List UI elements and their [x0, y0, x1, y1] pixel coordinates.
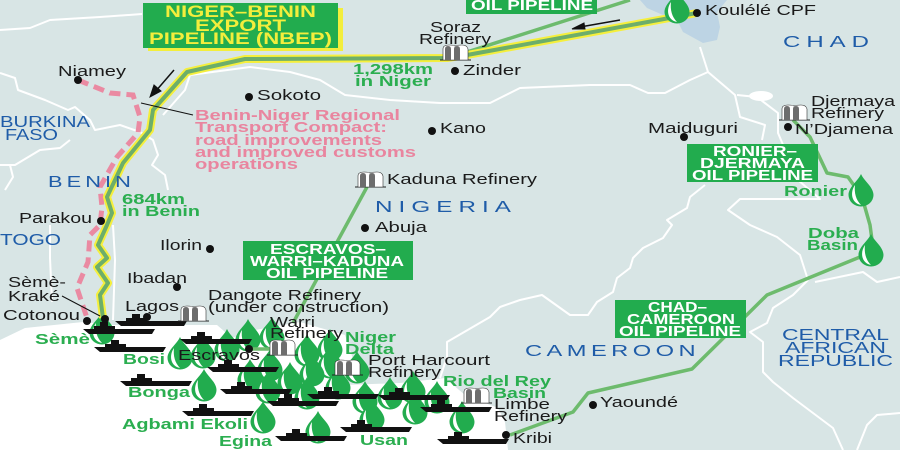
- label box: Escravos-Warri-Kaduna pipeline: [243, 241, 413, 282]
- label box: Chad-Cameroon pipeline: CHAD–: [648, 299, 707, 316]
- green field and distance labels: Delta: [345, 341, 395, 358]
- place labels: Refinery: [419, 31, 492, 48]
- place labels: Maiduguri: [648, 120, 738, 137]
- green field and distance labels: Ronier: [784, 183, 847, 200]
- place labels: Port Harcourt: [368, 352, 491, 369]
- callout: transport compact: operations: [195, 156, 298, 173]
- label box: Escravos-Warri-Kaduna pipeline: WARRI–KADUNA: [250, 253, 404, 270]
- callout: transport compact: Benin-Niger Regional: [195, 107, 400, 124]
- label box: Chad-Cameroon pipeline: CAMEROON: [627, 311, 735, 328]
- place labels: Sèmè-: [8, 274, 66, 291]
- title box: NBEP: [143, 2, 343, 51]
- country labels: REPUBLIC: [778, 353, 893, 370]
- place labels: Yaoundé: [600, 394, 678, 411]
- green field and distance labels: Bosi: [123, 351, 165, 368]
- place labels: Cotonou: [3, 307, 80, 324]
- green field and distance labels: Rio del Rey: [443, 373, 552, 390]
- country labels: BENIN: [48, 174, 135, 191]
- place labels: Refinery: [270, 325, 344, 342]
- label box: Chad-Cameroon pipeline: [615, 299, 746, 340]
- place labels: Koulélé CPF: [705, 2, 816, 19]
- field drops: Ronier and Doba: [848, 174, 884, 266]
- place labels: Parakou: [19, 210, 92, 227]
- label box: Ronier-Djermaya pipeline: OIL PIPELINE: [692, 167, 813, 184]
- place labels: Niamey: [58, 63, 127, 80]
- place labels: Escravos: [178, 347, 260, 364]
- title box: NBEP: PIPELINE (NBEP): [149, 29, 332, 48]
- green field and distance labels: 1,298km: [353, 61, 433, 78]
- place labels: Dangote Refinery: [208, 287, 362, 304]
- refineries: [178, 45, 810, 403]
- label box: Escravos-Warri-Kaduna pipeline: ESCRAVOS–: [270, 241, 386, 258]
- other oil pipelines: [248, 0, 872, 435]
- place labels: Refinery: [811, 105, 885, 122]
- oil field drops: [90, 312, 474, 444]
- green field and distance labels: Egina: [219, 433, 273, 450]
- place labels: Sokoto: [257, 87, 321, 104]
- country labels: TOGO: [0, 232, 61, 249]
- place labels: Ilorin: [160, 237, 202, 254]
- label box: Ronier-Djermaya pipeline: DJERMAYA: [700, 155, 805, 172]
- city dots: [74, 9, 792, 439]
- green field and distance labels: Niger: [345, 329, 396, 346]
- place labels: Kribi: [513, 430, 552, 447]
- ships: [83, 314, 509, 444]
- country labels: CHAD: [783, 34, 875, 51]
- place labels: (under construction): [208, 299, 389, 316]
- label box: Ronier-Djermaya pipeline: [687, 143, 818, 184]
- leader line: Seme-Krake: [62, 296, 100, 316]
- green field and distance labels: Doba: [808, 225, 860, 242]
- arrow: flow direction west: [572, 20, 620, 29]
- ocean: Gulf of Guinea: [0, 322, 508, 450]
- callout: transport compact: [195, 107, 416, 173]
- field drop: Koulele: [664, 0, 690, 24]
- place labels: N’Djamena: [795, 121, 894, 138]
- place labels: Soraz: [430, 19, 481, 36]
- green field and distance labels: Sèmè: [35, 331, 90, 348]
- place labels: Ibadan: [127, 270, 187, 287]
- country labels: CENTRAL: [782, 327, 889, 344]
- label box: Escravos-Warri-Kaduna pipeline: OIL PIPELINE: [266, 265, 388, 282]
- country labels: FASO: [5, 127, 58, 144]
- place labels: Kano: [440, 120, 486, 137]
- place labels: Kraké: [8, 288, 60, 305]
- small lake near N'Djamena: [749, 91, 773, 101]
- country labels: NIGERIA: [375, 199, 517, 216]
- label box: Ronier-Djermaya pipeline: RONIER–: [713, 143, 797, 160]
- place labels: Limbe: [494, 396, 550, 413]
- place labels: Lagos: [125, 298, 179, 315]
- green field and distance labels: Basin: [493, 385, 546, 402]
- country labels: AFRICAN: [785, 340, 886, 357]
- NBEP pipeline: [97, 13, 697, 318]
- place labels: Djermaya: [811, 93, 896, 110]
- leader line: transport compact: [141, 103, 193, 115]
- title box: NBEP: NIGER–BENIN: [165, 2, 316, 21]
- green field and distance labels: in Benin: [122, 203, 200, 220]
- callout: transport compact: road improvements: [195, 132, 382, 149]
- green field and distance labels: [35, 61, 860, 450]
- green field and distance labels: Bonga: [128, 384, 191, 401]
- place labels: Zinder: [463, 62, 521, 79]
- title box: NBEP: EXPORT: [195, 16, 287, 35]
- country labels: BURKINA: [0, 114, 90, 131]
- country labels: [0, 34, 893, 370]
- callout: transport compact: Transport Compact:: [195, 119, 387, 136]
- label box: Chad-Cameroon pipeline: OIL PIPELINE: [619, 323, 741, 340]
- callout: transport compact: and improved customs: [195, 144, 416, 161]
- place labels: Abuja: [375, 219, 428, 236]
- green field and distance labels: Usan: [360, 432, 408, 449]
- country labels: CAMEROON: [525, 343, 700, 360]
- place labels: Warri: [270, 314, 315, 331]
- place labels: Refinery: [494, 408, 568, 425]
- green field and distance labels: Agbami Ekoli: [122, 416, 248, 433]
- Lake Chad: [640, 0, 727, 43]
- green field and distance labels: in Niger: [355, 73, 431, 90]
- green field and distance labels: Basin: [807, 237, 858, 254]
- green field and distance labels: 684km: [122, 191, 185, 208]
- arrow: flow direction south: [150, 70, 174, 97]
- place labels: Kaduna Refinery: [387, 171, 538, 188]
- place labels: Refinery: [368, 364, 442, 381]
- Benin-Niger transport corridor: [77, 80, 140, 318]
